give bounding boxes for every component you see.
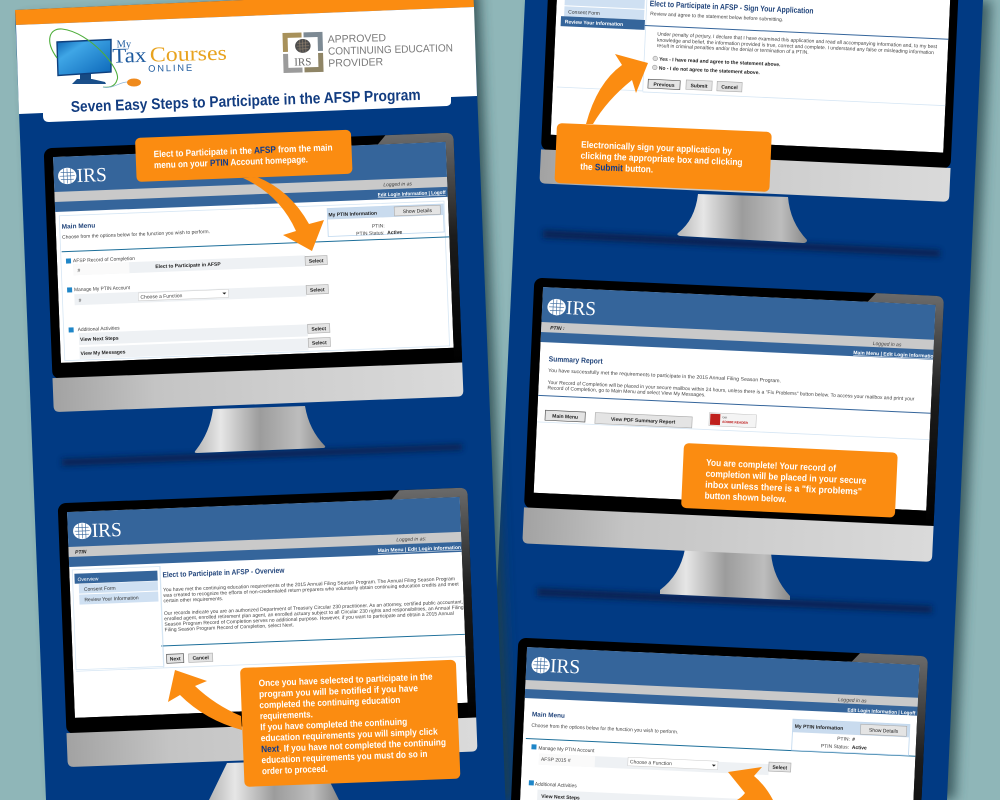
orange top band: [15, 0, 474, 25]
menu rows: [528, 744, 791, 800]
menu rows: AFSP 2015 #: [541, 757, 571, 764]
arrow: to Yes radio: [586, 54, 648, 124]
screen: summary report: Main Menu: [552, 414, 578, 421]
icon: IRS badge: IRS: [294, 56, 312, 69]
monitor frame: [539, 0, 961, 202]
monitor stand: step 1: [195, 406, 325, 453]
PTIN information box: My PTIN Information: [328, 211, 377, 218]
callout: step 4: completion will be placed in your secure: [705, 469, 867, 486]
monitor shadow: step 3: [543, 230, 940, 257]
menu rows: Select: [312, 340, 327, 347]
overview paragraphs: You have met the continuing education requirements of the 2015 Annual Filing Season Program. The Annual Filing Season Program: [163, 576, 455, 593]
sheet blue background: [15, 0, 506, 800]
icon: IRS logo: [532, 656, 579, 674]
PTIN information box: Active: [387, 230, 403, 236]
summary text: [548, 368, 914, 401]
arrow: to Next button: [168, 670, 242, 730]
PTIN information box: [792, 719, 910, 755]
screen: sign application: Submit: [690, 83, 708, 90]
screen: sign application: Review Your Information: [565, 19, 623, 28]
screen: sign application: [551, 0, 953, 153]
callout: step 2: completed the continuing education: [259, 695, 401, 710]
sidebar menu: Review Your Information: [84, 595, 139, 603]
screen: sign application: Cancel: [721, 84, 738, 91]
callout: step 4: button shown below.: [704, 490, 787, 504]
panel: left sheet shadow: [24, 0, 512, 800]
logo: IRS approved provider: [282, 28, 454, 73]
callout: step 3: [554, 123, 772, 192]
PTIN information box: Active: [852, 745, 867, 752]
sidebar menu: Consent Form: [84, 586, 116, 593]
callout: step 1: [135, 130, 353, 182]
menu rows: Additional Activities: [78, 326, 120, 333]
arrow: to Select in Manage row: [728, 767, 773, 800]
title: Seven Easy Steps to Participate in the AFSP Program: [71, 87, 421, 116]
icon: Adobe Reader badge: Get: [722, 415, 727, 419]
provider text: CONTINUING EDUCATION: [328, 42, 453, 58]
icon: IRS logo: [73, 522, 121, 540]
screen: sign application: Consent Form: [568, 9, 600, 17]
logo wordmark: My: [116, 39, 132, 50]
icon: IRS logo: [547, 298, 595, 316]
logo wordmark: Courses: [150, 41, 227, 66]
perjury statement: result in criminal penalties and/or the denial or termination of a PTIN.: [657, 43, 809, 56]
menu rows: Additional Activities: [535, 781, 577, 789]
screen: manage account: Main Menu: [532, 711, 565, 720]
callout: step 2: Next. If you have not completed the continuing: [261, 737, 446, 754]
screen: overview: Next: [170, 656, 181, 663]
menu rows: #: [78, 298, 82, 304]
callout: step 3: clicking the appropriate box and clicking: [580, 151, 743, 167]
monitor stand: step 2: [209, 760, 339, 800]
PTIN information box: Show Details: [869, 728, 899, 735]
screen: main menu: [53, 142, 454, 363]
PTIN information box: PTIN Status:: [821, 743, 849, 751]
PTIN information box: Show Details: [403, 208, 433, 215]
radio options: Yes - I have read and agree to the statement above.: [659, 57, 781, 68]
PTIN information box: PTIN:: [837, 736, 850, 743]
screen: summary report: View PDF Summary Report: [611, 417, 676, 426]
monitor: step 2 overview: [58, 488, 477, 767]
icon: computer monitor: [50, 29, 141, 87]
PTIN information box: PTIN Status:: [356, 230, 385, 237]
menu rows: Elect to Participate in AFSP: [155, 262, 221, 270]
perjury statement: knowledge and belief, the information provided is true, correct and complete. I understand any false or misleading information: [657, 38, 934, 56]
white header panel: [16, 7, 477, 122]
screen: summary report: Main Menu | Edit Login Information: [853, 350, 937, 360]
summary text: Record of Completion, go to Main Menu and select View My Messages.: [547, 385, 706, 398]
callout: step 2: requirements.: [260, 709, 313, 721]
menu rows: Select: [772, 765, 788, 771]
callout: step 2: program you will be notified if you have: [259, 683, 418, 699]
callout: step 1: Elect to Participate in the AFSP from the main: [153, 142, 333, 159]
callout: step 2: education requirements you will simply click: [261, 726, 439, 743]
menu rows: [66, 249, 331, 360]
PTIN information box: PTIN:: [372, 223, 385, 230]
monitor frame: [44, 133, 463, 412]
screen: overview: Logged in as:: [396, 536, 427, 543]
icon: IRS logo: IRS: [550, 655, 581, 678]
menu rows: AFSP Record of Completion: [73, 256, 135, 264]
menu rows: Manage My PTIN Account: [538, 746, 595, 754]
radio options: [652, 56, 780, 74]
monitor: step 4 summary report: [522, 278, 944, 562]
screen: overview: Main Menu | Edit Login Information |: [378, 545, 465, 554]
icon: IRS logo: IRS: [566, 297, 597, 320]
menu rows: Choose a Function: [630, 759, 672, 767]
overview paragraphs: Filing Season Program Record of Completion, select Next.: [164, 622, 294, 633]
monitor: step 1 main menu: [44, 133, 463, 412]
summary text: Your Record of Completion will be placed in your secure mailbox within 24 hours, unless there is a "Fix Problems" button below. To access your mailbox and print your: [548, 380, 915, 402]
callout: step 2: If you have completed the continuing: [260, 717, 408, 732]
monitor frame: [522, 278, 944, 562]
provider text: PROVIDER: [328, 56, 384, 70]
screen: sign application: Previous: [653, 82, 675, 89]
icon: IRS logo: IRS: [91, 519, 122, 542]
monitor: step 3 sign application: [539, 0, 961, 202]
panel: right sheet: [487, 0, 983, 800]
callout: step 3: the Submit button.: [580, 162, 653, 175]
icon: Adobe Reader badge: [709, 413, 756, 428]
screen: main menu: Logged in as: [383, 181, 413, 188]
icon: IRS badge: [282, 32, 324, 73]
radio options: No - I do not agree to the statement above.: [659, 66, 761, 76]
perjury statement: Under penalty of perjury, I declare that I have examined this application and read all accompanying information and, to my best: [657, 32, 938, 50]
menu rows: View My Messages: [80, 349, 126, 357]
menu rows: Select: [311, 326, 327, 333]
panel: left sheet: [15, 0, 506, 800]
logo wordmark: [112, 37, 227, 75]
menu rows: Select: [310, 287, 325, 294]
PTIN information box: #: [852, 737, 855, 743]
overview paragraphs: [163, 576, 464, 633]
callout: step 4: You are complete! Your record of: [706, 458, 837, 473]
overview paragraphs: Season Program Record of Completion serves no additional purpose. However, if you want to participate and obtain a 2015 Annual: [164, 611, 454, 628]
callout: step 4: [681, 443, 898, 518]
monitor stand: step 4: [660, 549, 790, 600]
summary text: You have successfully met the requirements to participate in the 2015 Annual Filing Season Program.: [548, 368, 781, 384]
screen: overview: [67, 497, 470, 718]
screen: overview: PTIN: [75, 549, 87, 556]
icon: IRS logo: IRS: [76, 164, 107, 187]
sidebar menu: Overview: [78, 576, 99, 583]
provider text: [328, 30, 453, 70]
screen: manage account: Choose from the options below for the function you wish to perform.: [531, 723, 678, 735]
callout: step 2: [240, 660, 460, 787]
screen: sign application: Review and agree to the statement below before submitting.: [650, 11, 783, 23]
screen: summary report: Logged in as: [873, 341, 902, 348]
callout: step 3: Electronically sign your application by: [581, 140, 733, 156]
screen: summary report: PTIN :: [550, 325, 565, 332]
icon: IRS logo: [58, 168, 106, 184]
monitor: step 5 main menu: [508, 638, 928, 800]
menu rows: View Next Steps: [80, 336, 119, 343]
callout: step 2: Once you have selected to participate in the: [258, 672, 433, 688]
callout: step 4: inbox unless there is a "fix problems": [705, 480, 862, 497]
monitor shadow: step 4: [537, 588, 932, 613]
PTIN information box: My PTIN Information: [795, 724, 843, 732]
overview paragraphs: certain other requirements.: [163, 596, 223, 604]
screen: main menu: Choose from the options below for the function you wish to perform.: [62, 229, 210, 241]
menu rows: Choose a Function: [140, 293, 183, 301]
callout: step 1: menu on your PTIN Account homepage.: [154, 154, 308, 170]
monitor frame: [58, 488, 477, 767]
overview paragraphs: Our records indicate you are an authorized Department of Treasury Circular 230 practitioner. As an attorney, certified public accountant,: [164, 599, 463, 617]
screen: main menu: Edit Login Information | Logoff: [378, 190, 446, 199]
screen: manage account: Logged in as: [838, 697, 867, 704]
arrow: to Elect to Participate select: [243, 177, 324, 251]
menu rows: #: [77, 268, 81, 274]
panel: right sheet shadow: [497, 0, 991, 800]
overview paragraphs: was created to recognize the efforts of non-credentialed return preparers who voluntarily obtain continuing education credits and meet: [163, 581, 459, 599]
menu rows: Select: [309, 258, 324, 265]
screen: summary report: Summary Report: [549, 354, 603, 366]
callout: step 2: education requirements you must do so in: [261, 749, 428, 765]
screen: overview: Elect to Participate in AFSP - Overview: [162, 566, 285, 579]
logo: My Tax Courses Online: [50, 29, 227, 87]
screen: main menu: Main Menu: [62, 222, 95, 231]
screen: manage account: [518, 647, 920, 800]
callout: step 2: order to proceed.: [262, 764, 328, 776]
provider text: APPROVED: [328, 32, 387, 46]
sidebar menu: [72, 566, 164, 670]
overview paragraphs: enrolled agent, enrolled retirement plan agent, an enrolled actuary subject to all Circular 230 rights and responsibilities, an Annual Filing: [164, 605, 464, 622]
menu rows: Manage My PTIN Account: [74, 285, 131, 293]
PTIN information box: [327, 204, 444, 238]
screen: overview: Cancel: [192, 655, 210, 662]
monitor stand: step 3: [677, 194, 807, 243]
screen: manage account: Edit Login Information | Logoff: [847, 708, 916, 717]
logo wordmark: Tax: [112, 43, 147, 68]
logo wordmark: ONLINE: [148, 63, 192, 74]
screen: summary report: [534, 287, 939, 511]
monitor frame: [508, 638, 928, 800]
monitor shadow: step 1: [62, 444, 462, 466]
icon: Adobe Reader badge: ADOBE READER: [722, 420, 749, 425]
